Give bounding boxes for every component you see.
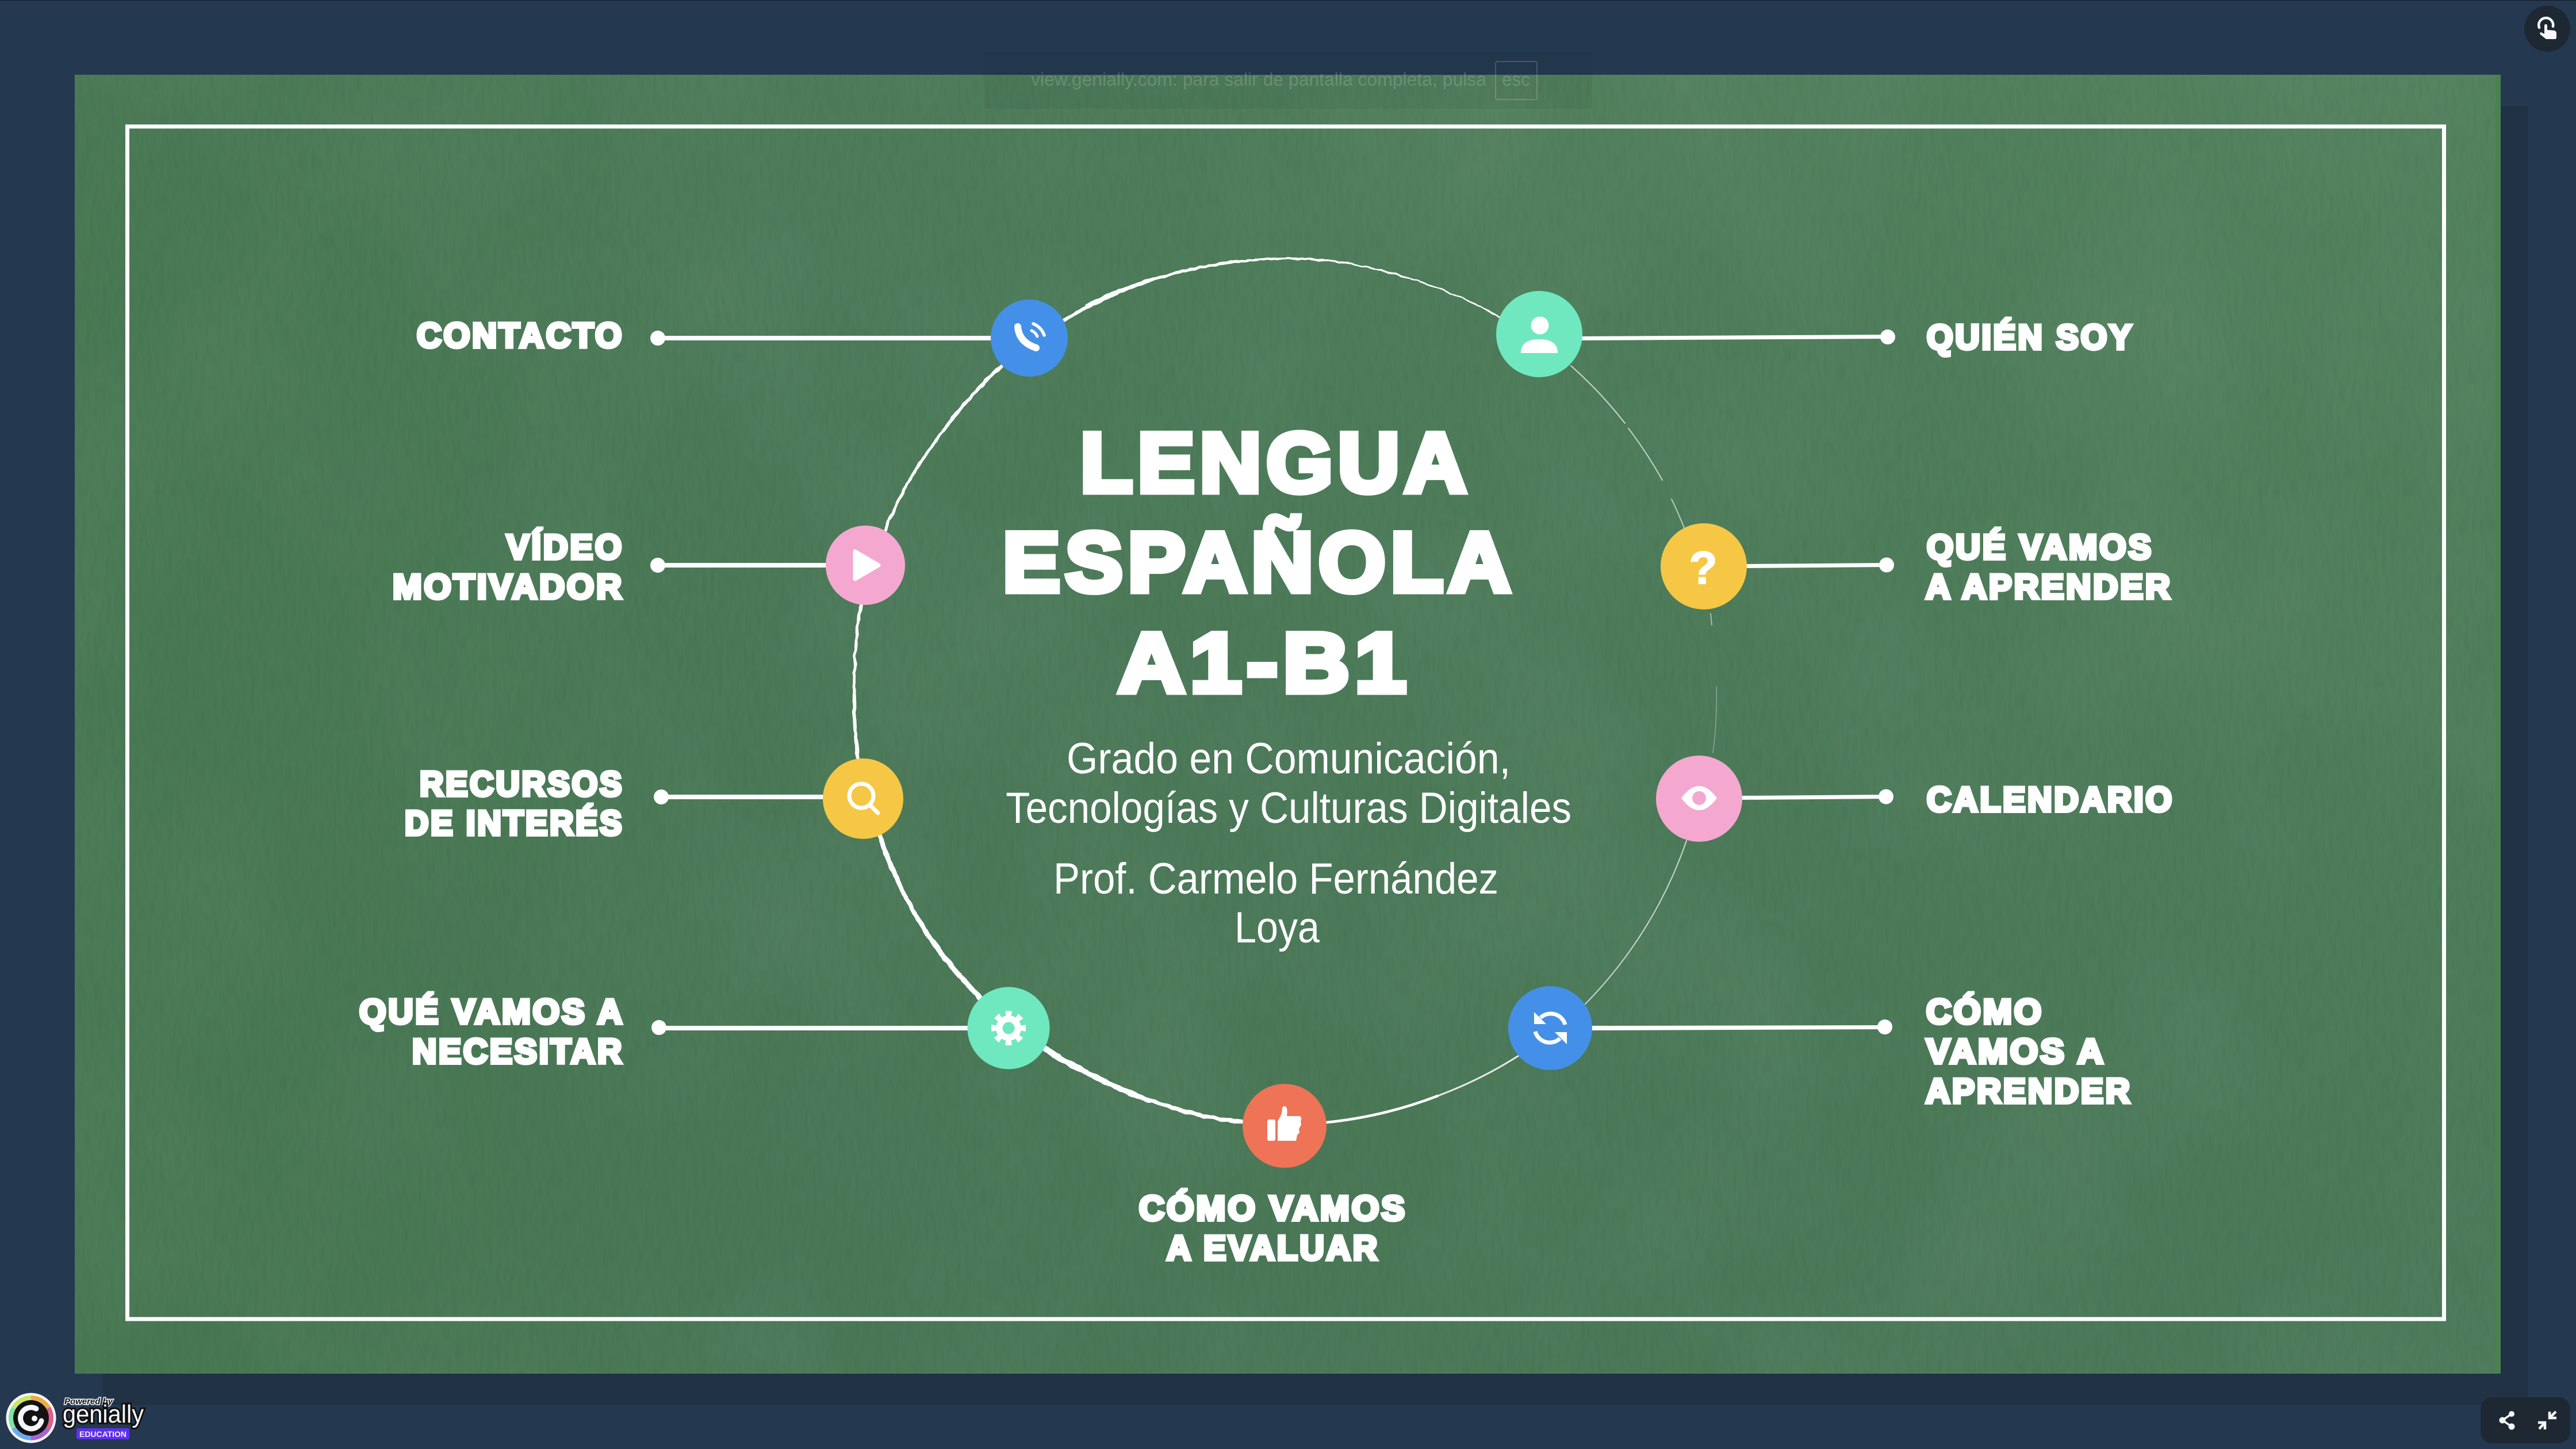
label: que vamos a necesitar: NECESITAR [412,1032,624,1071]
title: ESPAÑOLA [1003,515,1516,609]
connector: que vamos a necesitar [651,1020,972,1035]
icon: question [1661,523,1747,610]
label: que vamos a aprender [1926,528,2172,606]
icon: person [1496,291,1582,377]
logo: genially [6,1393,144,1443]
label: video motivador: MOTIVADOR [393,568,624,606]
icon: thumbs up [1243,1084,1327,1168]
connector: calendario [1739,789,1893,804]
label: recursos de interes: DE INTERÉS [405,804,624,842]
connector: recursos de interes [654,789,828,804]
subtitle: degree: Grado en Comunicación, [1067,734,1511,783]
toolbar: share and exit fullscreen [2481,1397,2570,1443]
logo: genially: genially [63,1400,144,1428]
fullscreen notice [984,52,1592,109]
subtitle: professor: Prof. Carmelo Fernández [1053,854,1498,903]
logo: genially: EDUCATION [79,1429,126,1439]
subtitle: degree: Tecnologías y Culturas Digitales [1006,784,1571,833]
icon: phone [991,300,1068,377]
chalk frame [128,126,2444,1319]
label: como vamos a aprender: VAMOS A [1926,1032,2106,1071]
title: A1-B1 [1118,616,1412,710]
subtitle: professor: Loya [1235,903,1320,952]
label: que vamos a aprender: QUÉ VAMOS [1927,528,2153,566]
icon: question: ? [1689,542,1717,593]
title: LENGUA [1080,416,1471,509]
label: calendario: CALENDARIO [1927,780,2174,819]
connector: que vamos a aprender [1742,558,1894,573]
label: como vamos a evaluar: CÓMO VAMOS [1139,1189,1407,1228]
icon: eye [1656,756,1742,842]
subtitle: professor [1053,854,1498,952]
connector: video motivador [650,558,830,573]
icon: refresh [1508,986,1592,1070]
label: quien soy: QUIÉN SOY [1927,318,2134,356]
icon: gear [967,987,1050,1070]
subtitle: degree [1006,734,1571,833]
fullscreen notice: esc [1502,69,1530,90]
icon: search [823,758,903,839]
label: recursos de interes [405,765,624,842]
label: recursos de interes: RECURSOS [420,765,624,803]
label: como vamos a evaluar [1139,1189,1407,1267]
connector: como vamos a aprender [1588,1019,1892,1034]
icon: share [2499,1411,2515,1429]
top edge line [0,0,2576,1]
title [1003,416,1516,710]
connector: contacto [650,331,997,346]
label: como vamos a aprender: APRENDER [1926,1072,2132,1110]
fullscreen notice: view.genially.com: para salir de pantalla completa, pulsa [1031,69,1486,90]
label: video motivador [393,528,624,606]
chalk circle [854,259,1716,1122]
label: como vamos a aprender [1926,992,2132,1110]
icon: touch toggle button [2524,6,2570,52]
label: contacto: CONTACTO [417,316,624,355]
label: como vamos a aprender: CÓMO [1926,992,2044,1031]
icon: play [826,526,905,605]
icon: exit fullscreen [2538,1412,2556,1429]
label: que vamos a necesitar [359,992,624,1071]
label: video motivador: VÍDEO [507,528,624,566]
logo: genially: Powered by [64,1397,113,1406]
label: que vamos a aprender: A APRENDER [1926,568,2172,606]
label: que vamos a necesitar: QUÉ VAMOS A [359,992,624,1031]
label: como vamos a evaluar: A EVALUAR [1167,1229,1379,1267]
connector: quien soy [1578,329,1895,344]
